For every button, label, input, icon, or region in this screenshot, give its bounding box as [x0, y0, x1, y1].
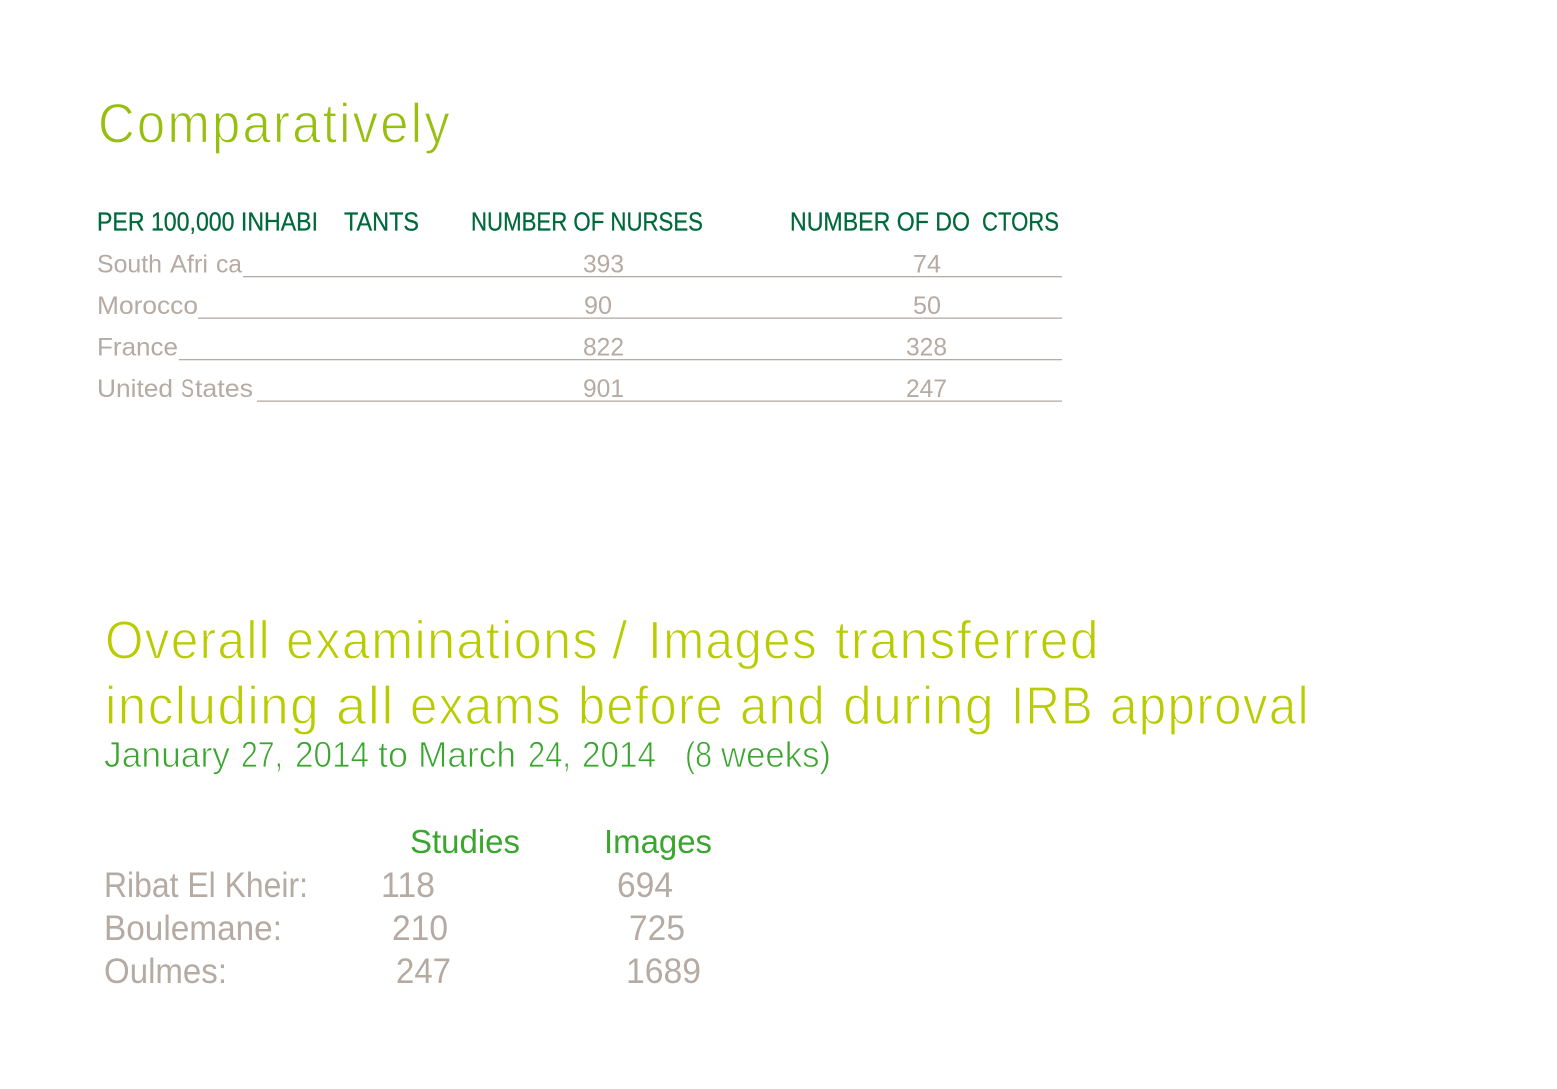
title: Comparatively: Comparatively	[98, 92, 452, 154]
table header row: PER 100,000 INHABI	[97, 208, 318, 236]
heading: overall examinations and images transferred: transferred	[835, 610, 1100, 670]
date range subheading: 27,	[241, 734, 283, 775]
row: Morocco: Morocco	[97, 292, 198, 320]
date range subheading: 24,	[528, 734, 571, 775]
row: Oulmes: 247	[396, 952, 451, 991]
row: Boulemane: 210	[392, 909, 448, 948]
date range subheading: March	[418, 734, 516, 775]
heading: overall examinations and images transferred	[105, 610, 1310, 736]
heading: overall examinations and images transferred: and	[740, 676, 826, 736]
heading: overall examinations and images transferred: during	[843, 676, 995, 736]
table header row: NUMBER OF DO	[790, 208, 970, 236]
heading: overall examinations and images transferred: before	[578, 676, 724, 736]
row: Morocco: 90	[584, 292, 612, 320]
heading: overall examinations and images transferred: approval	[1110, 676, 1310, 736]
heading: overall examinations and images transferred: IRB	[1011, 676, 1094, 736]
row: Ribat El Kheir: 694	[617, 866, 673, 905]
table header row	[97, 208, 1059, 236]
row: Ribat El Kheir: 118	[381, 866, 435, 905]
table header row: TANTS	[344, 208, 419, 236]
row: Ribat El Kheir: Ribat El Kheir:	[104, 866, 308, 905]
date range subheading: to	[378, 734, 408, 775]
table header row: CTORS	[982, 208, 1059, 236]
table: studies and images by site	[104, 823, 712, 991]
row: United States: United	[97, 375, 173, 403]
date range subheading: 2014	[295, 734, 369, 775]
row: Boulemane	[104, 909, 685, 948]
row: United States: tates	[195, 375, 253, 403]
row: France: 328	[906, 334, 947, 362]
heading: overall examinations and images transferred: Overall	[105, 610, 271, 670]
table header row: NUMBER OF NURSES	[471, 208, 703, 236]
row: Boulemane: 725	[629, 909, 685, 948]
row: United States	[97, 375, 1062, 403]
date range subheading: January	[104, 734, 230, 775]
date range subheading: (8	[685, 734, 712, 775]
row: United States: S	[181, 375, 194, 403]
heading: overall examinations and images transferred: Images	[648, 610, 818, 670]
row: Morocco	[97, 292, 1062, 320]
table: nurses and doctors per 100,000 inhabitants	[97, 208, 1062, 403]
row: South Africa	[97, 250, 1062, 278]
heading: overall examinations and images transferred: including	[105, 676, 320, 736]
column headings: Images	[604, 823, 712, 860]
row: Ribat El Kheir	[104, 866, 673, 905]
row: United States: 901	[583, 375, 624, 403]
row: France: 822	[583, 334, 624, 362]
date range subheading: 2014	[582, 734, 656, 775]
row: South Africa: Afri	[170, 250, 208, 278]
heading: overall examinations and images transferred: all	[336, 676, 395, 736]
row: Boulemane: Boulemane:	[104, 909, 282, 948]
heading: overall examinations and images transferred: examinations	[286, 610, 599, 670]
row: United States: 247	[906, 375, 947, 403]
column headings	[410, 823, 712, 860]
row: France: France	[97, 334, 178, 362]
heading: overall examinations and images transferred: exams	[410, 676, 562, 736]
heading: overall examinations and images transferred: /	[612, 610, 629, 670]
column headings: Studies	[410, 823, 520, 860]
row: France	[97, 334, 1062, 362]
date range subheading	[104, 734, 831, 775]
row: South Africa: 74	[913, 250, 941, 278]
row: Morocco: 50	[913, 292, 941, 320]
date range subheading: weeks)	[720, 734, 831, 775]
row: Oulmes: Oulmes:	[104, 952, 227, 991]
row: South Africa: 393	[583, 250, 624, 278]
row: South Africa: ca	[216, 250, 242, 278]
row: Oulmes	[104, 952, 701, 991]
row: Oulmes: 1689	[626, 952, 701, 991]
row: South Africa: South	[97, 250, 162, 278]
